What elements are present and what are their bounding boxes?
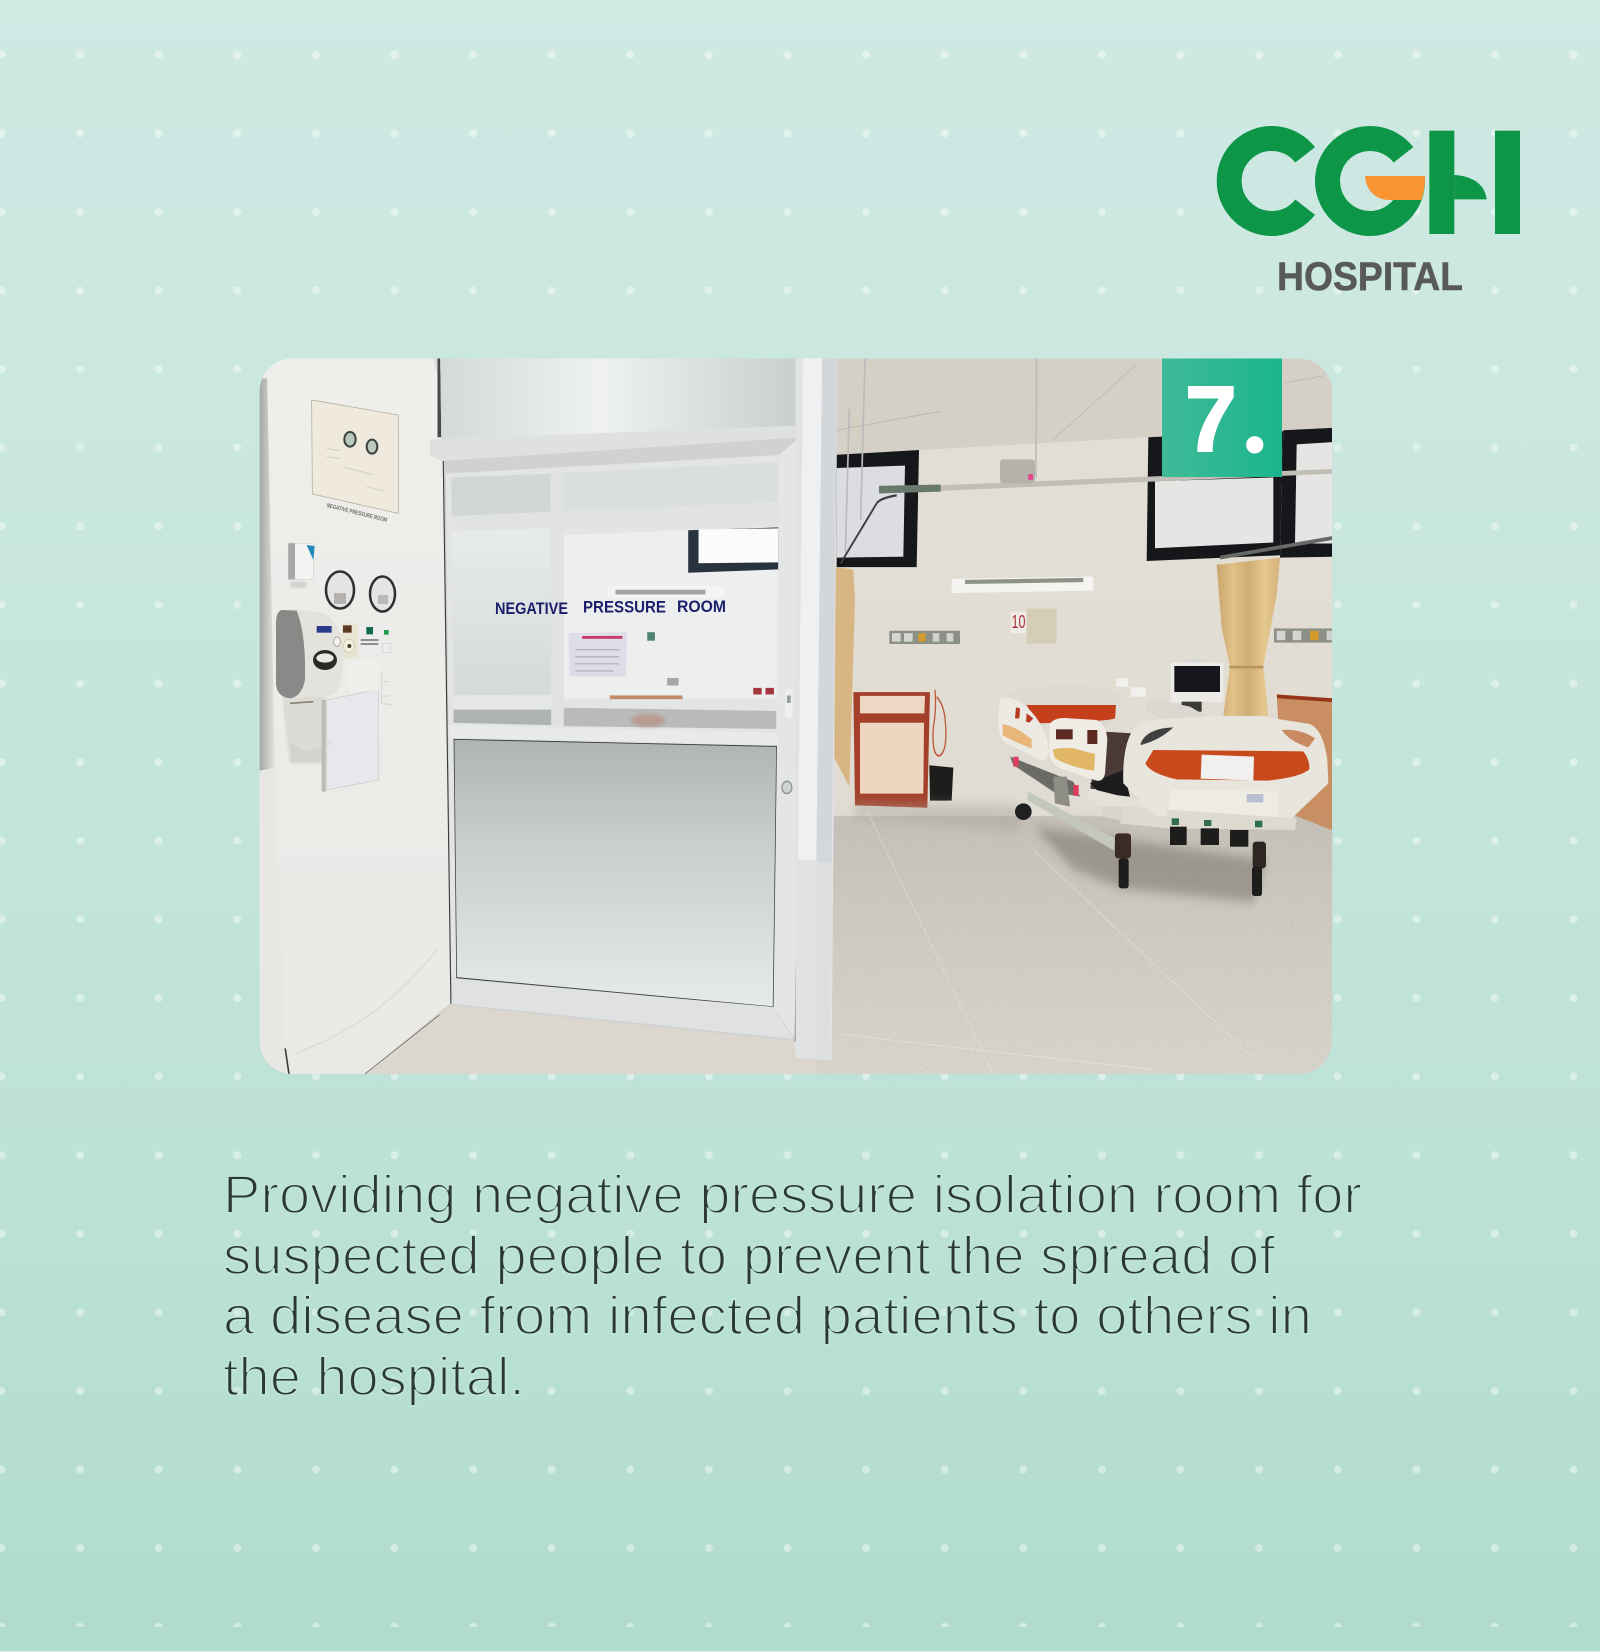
far headboard <box>1026 705 1116 724</box>
side rail 1 <box>998 698 1049 760</box>
photo base <box>434 358 438 376</box>
left curtain <box>833 567 855 787</box>
door leaf <box>443 437 800 1041</box>
hand sanitizer dispenser and control panel <box>276 610 393 792</box>
hospital bed with monitor <box>998 659 1328 896</box>
step number 7.: 7 <box>1185 367 1237 471</box>
undercarriage and wheels <box>1115 790 1297 896</box>
door sign: NEGATIVE PRESSURE ROOM: PRESSURE <box>583 598 666 616</box>
wall-mounted poster and label <box>288 400 398 588</box>
bedside cabinet <box>853 692 930 808</box>
transom glass <box>440 358 797 442</box>
dispenser shadow <box>283 697 326 763</box>
ward room: wall, windows, furniture <box>830 358 1333 1074</box>
patient monitor <box>1171 659 1223 712</box>
panel <box>342 624 358 658</box>
bracket <box>286 700 332 750</box>
door sign: NEGATIVE PRESSURE ROOM: NEGATIVE <box>495 600 568 618</box>
body text: Providing negative pressure isolation room for <box>223 1165 1362 1225</box>
photo: negative pressure isolation room: NEGATIVE PRESSURE ROOM <box>326 503 388 524</box>
photo: negative pressure isolation room <box>259 358 1333 1075</box>
right curtain <box>1217 558 1280 716</box>
right cabinet <box>1277 694 1332 830</box>
logo mark: CGH letters <box>1229 131 1520 234</box>
door sign: NEGATIVE PRESSURE ROOM: ROOM <box>677 598 726 616</box>
footboard <box>1123 716 1328 820</box>
dispenser body <box>286 610 343 696</box>
logo: CGH Hospital <box>1229 131 1520 299</box>
floor shadow strip at wall base <box>853 803 1020 831</box>
room sensor <box>288 543 315 588</box>
floor <box>387 816 1332 1074</box>
door, wall and glazing <box>260 358 837 1074</box>
body text: the hospital. <box>223 1347 525 1407</box>
step number badge <box>1162 358 1282 477</box>
pressure gauges <box>326 572 395 612</box>
floor speckle texture <box>396 815 1332 1074</box>
header beam <box>430 426 801 461</box>
paper sheet <box>327 689 378 790</box>
door post <box>795 358 837 1060</box>
grout lines <box>840 810 1253 1074</box>
floor under door <box>365 1004 816 1074</box>
side rail 2 <box>1049 718 1107 781</box>
bed frame <box>1010 757 1080 797</box>
body text: a disease from infected patients to others in <box>223 1286 1312 1346</box>
body text: suspected people to prevent the spread of <box>223 1226 1276 1286</box>
logo wordmark: HOSPITAL <box>1277 255 1463 299</box>
bed number sign: 10 <box>1012 612 1026 632</box>
mattress <box>1090 732 1133 790</box>
door sign: NEGATIVE PRESSURE ROOM <box>496 600 725 614</box>
wall panel <box>260 358 453 1074</box>
step number 7.: . <box>1243 368 1266 472</box>
body text <box>223 1165 1362 1407</box>
